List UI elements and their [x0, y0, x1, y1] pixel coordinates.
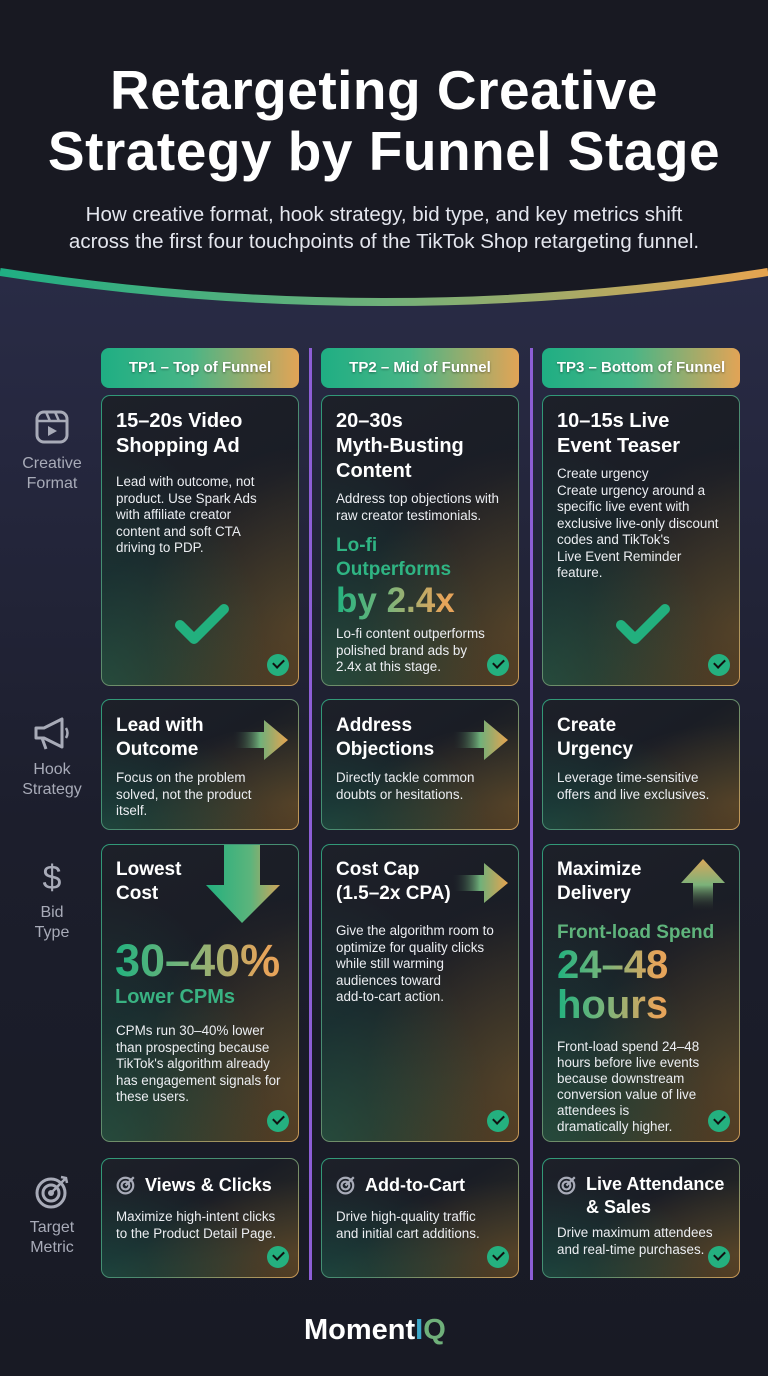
- card: TP1 bid: Lowest: [116, 859, 181, 880]
- column header: TP3: TP3 – Bottom of Funnel: [557, 359, 725, 376]
- card: TP1 bid: CPMs run 30–40% lower: [116, 1023, 264, 1038]
- stat: 24-48 hours: 24–48: [557, 943, 668, 987]
- card: TP2 metric: Add-to-Cart: [365, 1175, 465, 1195]
- card: TP3 bid: Maximize: [557, 859, 641, 880]
- row label: Hook Strategy: Hook: [33, 761, 71, 778]
- card: TP2 creative: polished brand ads by: [336, 642, 467, 658]
- card: TP3 hook: offers and live exclusives.: [557, 786, 709, 802]
- icon: arrow right: [458, 720, 508, 760]
- row label: Creative Format: Creative: [22, 455, 82, 472]
- card: TP3 creative: codes and TikTok's: [557, 532, 670, 547]
- column header: TP1: [101, 348, 299, 388]
- card: TP1 bid: than prospecting because: [116, 1040, 269, 1054]
- card: TP3 creative: [542, 395, 740, 686]
- card: TP2 creative: [321, 395, 519, 686]
- card: TP3 bid: dramatically higher.: [557, 1119, 672, 1134]
- stat: lo-fi 2.4x: by 2.4x: [336, 581, 455, 620]
- card: TP1 hook: solved, not the product: [116, 786, 251, 802]
- card: TP2 bid: [321, 844, 519, 1142]
- row label: Target Metric: Target: [30, 1219, 74, 1236]
- icon: big check: [616, 604, 670, 644]
- icon: megaphone: [34, 717, 69, 750]
- card: TP1 metric: Views & Clicks: [145, 1175, 272, 1195]
- row label: Creative Format: Format: [27, 475, 77, 492]
- card: TP2 creative: Address top objections with: [336, 491, 499, 506]
- card: TP3 creative: specific live event with: [557, 499, 689, 514]
- card: TP2 metric: and initial cart additions.: [336, 1226, 480, 1240]
- card: TP2 creative: raw creator testimonials.: [336, 508, 481, 522]
- icon: small target: [558, 1176, 576, 1194]
- card: TP2 creative: 2.4x at this stage.: [336, 659, 441, 674]
- card: TP2 bid: add-to-cart action.: [336, 989, 444, 1004]
- icon: up arrow: [681, 859, 725, 906]
- stat: 30-40%: [115, 935, 280, 1008]
- card: TP1 creative: Shopping Ad: [116, 435, 240, 457]
- stat: 24-48 hours: hours: [557, 983, 668, 1027]
- card: TP1 creative: with affiliate creator: [116, 507, 231, 522]
- card: TP3 bid: [542, 844, 740, 1142]
- column header: TP2: [321, 348, 519, 388]
- card: TP2 bid: while still warming: [336, 956, 444, 971]
- card: TP1 creative: [101, 395, 299, 686]
- row label: Target Metric: Metric: [30, 1239, 74, 1256]
- card: TP2 hook: Address: [336, 715, 412, 736]
- card: TP3 metric: Drive maximum attendees: [557, 1225, 713, 1240]
- card: TP2 bid: optimize for quality clicks: [336, 940, 484, 954]
- subtitle: [69, 203, 699, 253]
- logo: MomentIQ: MomentIQ: [304, 1314, 446, 1346]
- card: TP3 metric: Live Attendance: [586, 1174, 724, 1194]
- card: TP3 bid: conversion value of live: [557, 1087, 696, 1102]
- card: TP1 bid: Cost: [116, 883, 158, 904]
- row label: Creative Format: [22, 410, 82, 492]
- column header: TP3: [542, 348, 740, 388]
- card: TP3 hook: Leverage time-sensitive: [557, 770, 698, 785]
- card: TP2 hook: Objections: [336, 739, 434, 760]
- card: TP1 creative: Lead with outcome, not: [116, 474, 254, 489]
- row label: Hook Strategy: Strategy: [22, 781, 82, 798]
- row label: Target Metric: [30, 1176, 74, 1256]
- card: TP2 bid: Cost Cap: [336, 859, 419, 880]
- card: TP1 hook: [101, 699, 299, 830]
- header band: [0, 0, 768, 306]
- icon: arrow right: [458, 863, 508, 903]
- card: TP2 hook: Directly tackle common: [336, 770, 474, 785]
- card: TP3 creative: feature.: [557, 565, 602, 580]
- card: TP3 metric: and real-time purchases.: [557, 1242, 704, 1256]
- icon: dollar: $: [43, 859, 61, 897]
- icon: down arrow: [206, 845, 280, 923]
- row label: Bid Type: [35, 859, 69, 941]
- card: TP3 creative: Event Teaser: [557, 435, 680, 457]
- title: Strategy by Funnel Stage: [48, 120, 720, 182]
- card: TP1 hook: Focus on the problem: [116, 770, 246, 785]
- card: TP1 metric: to the Product Detail Page.: [116, 1226, 276, 1240]
- card: TP1 creative: driving to PDP.: [116, 540, 204, 555]
- icon: small target: [116, 1176, 134, 1194]
- card: TP3 bid: attendees is: [557, 1103, 629, 1118]
- card: TP3 creative: Create urgency around a: [557, 482, 705, 498]
- card: TP1 hook: itself.: [116, 803, 147, 818]
- card: TP1 metric: Maximize high-intent clicks: [116, 1209, 275, 1224]
- stat: lo-fi 2.4x: Lo-fi: [336, 535, 377, 556]
- card: TP3 creative: exclusive live-only discount: [557, 516, 719, 530]
- card: TP2 creative: 20–30s: [336, 410, 403, 432]
- icon: video clapper: [36, 410, 68, 444]
- card: TP2 hook: doubts or hesitations.: [336, 786, 463, 802]
- stat: 24-48 hours: [557, 922, 714, 1027]
- column header: TP1: TP1 – Top of Funnel: [129, 359, 271, 376]
- card: TP3 metric: [542, 1158, 740, 1278]
- card: TP2 hook: [321, 699, 519, 830]
- column header: TP2: TP2 – Mid of Funnel: [349, 359, 491, 376]
- card: TP3 bid: Front-load spend 24–48: [557, 1039, 699, 1054]
- row label: Bid Type: Type: [35, 924, 69, 941]
- card: TP3 bid: because downstream: [557, 1071, 684, 1086]
- card: TP3 metric: & Sales: [586, 1197, 651, 1217]
- stat: 24-48 hours: Front-load Spend: [557, 922, 714, 943]
- stat: 30-40%: Lower CPMs: [115, 986, 235, 1008]
- stat: lo-fi 2.4x: Outperforms: [336, 559, 451, 580]
- subtitle: How creative format, hook strategy, bid type, and key metrics shift: [86, 203, 682, 226]
- card: TP1 bid: TikTok's algorithm already: [116, 1056, 270, 1071]
- card: TP1 creative: 15–20s Video: [116, 410, 242, 432]
- card: TP1 bid: these users.: [116, 1089, 189, 1104]
- card: TP2 metric: [321, 1158, 519, 1278]
- stat: 30-40%: 30–40%: [115, 935, 280, 986]
- card: TP2 creative: Lo-fi content outperforms: [336, 626, 485, 641]
- card: TP1 creative: product. Use Spark Ads: [116, 490, 257, 506]
- icon: arrow right: [238, 720, 288, 760]
- card: TP2 creative: Myth-Busting: [336, 435, 464, 457]
- icon: big check: [175, 604, 229, 644]
- card: TP3 bid: hours before live events: [557, 1055, 699, 1070]
- card: TP1 creative: content and soft CTA: [116, 524, 241, 538]
- card: TP3 creative: 10–15s Live: [557, 410, 669, 432]
- card: TP3 hook: Urgency: [557, 739, 633, 760]
- stat: lo-fi 2.4x: [336, 535, 455, 620]
- title: Retargeting Creative: [110, 59, 658, 121]
- card: TP1 bid: has engagement signals for: [116, 1072, 281, 1088]
- card: TP3 hook: Create: [557, 715, 616, 736]
- card: TP3 bid: Delivery: [557, 883, 631, 904]
- card: TP1 bid: [101, 844, 299, 1142]
- row label: Hook Strategy: [22, 717, 82, 798]
- card: TP2 creative: Content: [336, 460, 412, 482]
- icon: target: [36, 1176, 68, 1208]
- card: TP3 creative: Live Event Reminder: [557, 548, 681, 564]
- card: TP1 hook: Outcome: [116, 739, 198, 760]
- card: TP2 bid: (1.5–2x CPA): [336, 883, 451, 904]
- card: TP3 creative: Create urgency: [557, 466, 649, 481]
- icon: small target: [336, 1176, 354, 1194]
- title: [48, 59, 720, 182]
- card: TP3 hook: [542, 699, 740, 830]
- subtitle: across the first four touchpoints of the TikTok Shop retargeting funnel.: [69, 230, 699, 253]
- card: TP1 metric: [101, 1158, 299, 1278]
- card: TP1 hook: Lead with: [116, 715, 204, 736]
- row label: Bid Type: Bid: [40, 904, 64, 921]
- card: TP2 metric: Drive high-quality traffic: [336, 1209, 476, 1224]
- card: TP2 bid: Give the algorithm room to: [336, 923, 494, 938]
- card: TP2 bid: audiences toward: [336, 972, 441, 988]
